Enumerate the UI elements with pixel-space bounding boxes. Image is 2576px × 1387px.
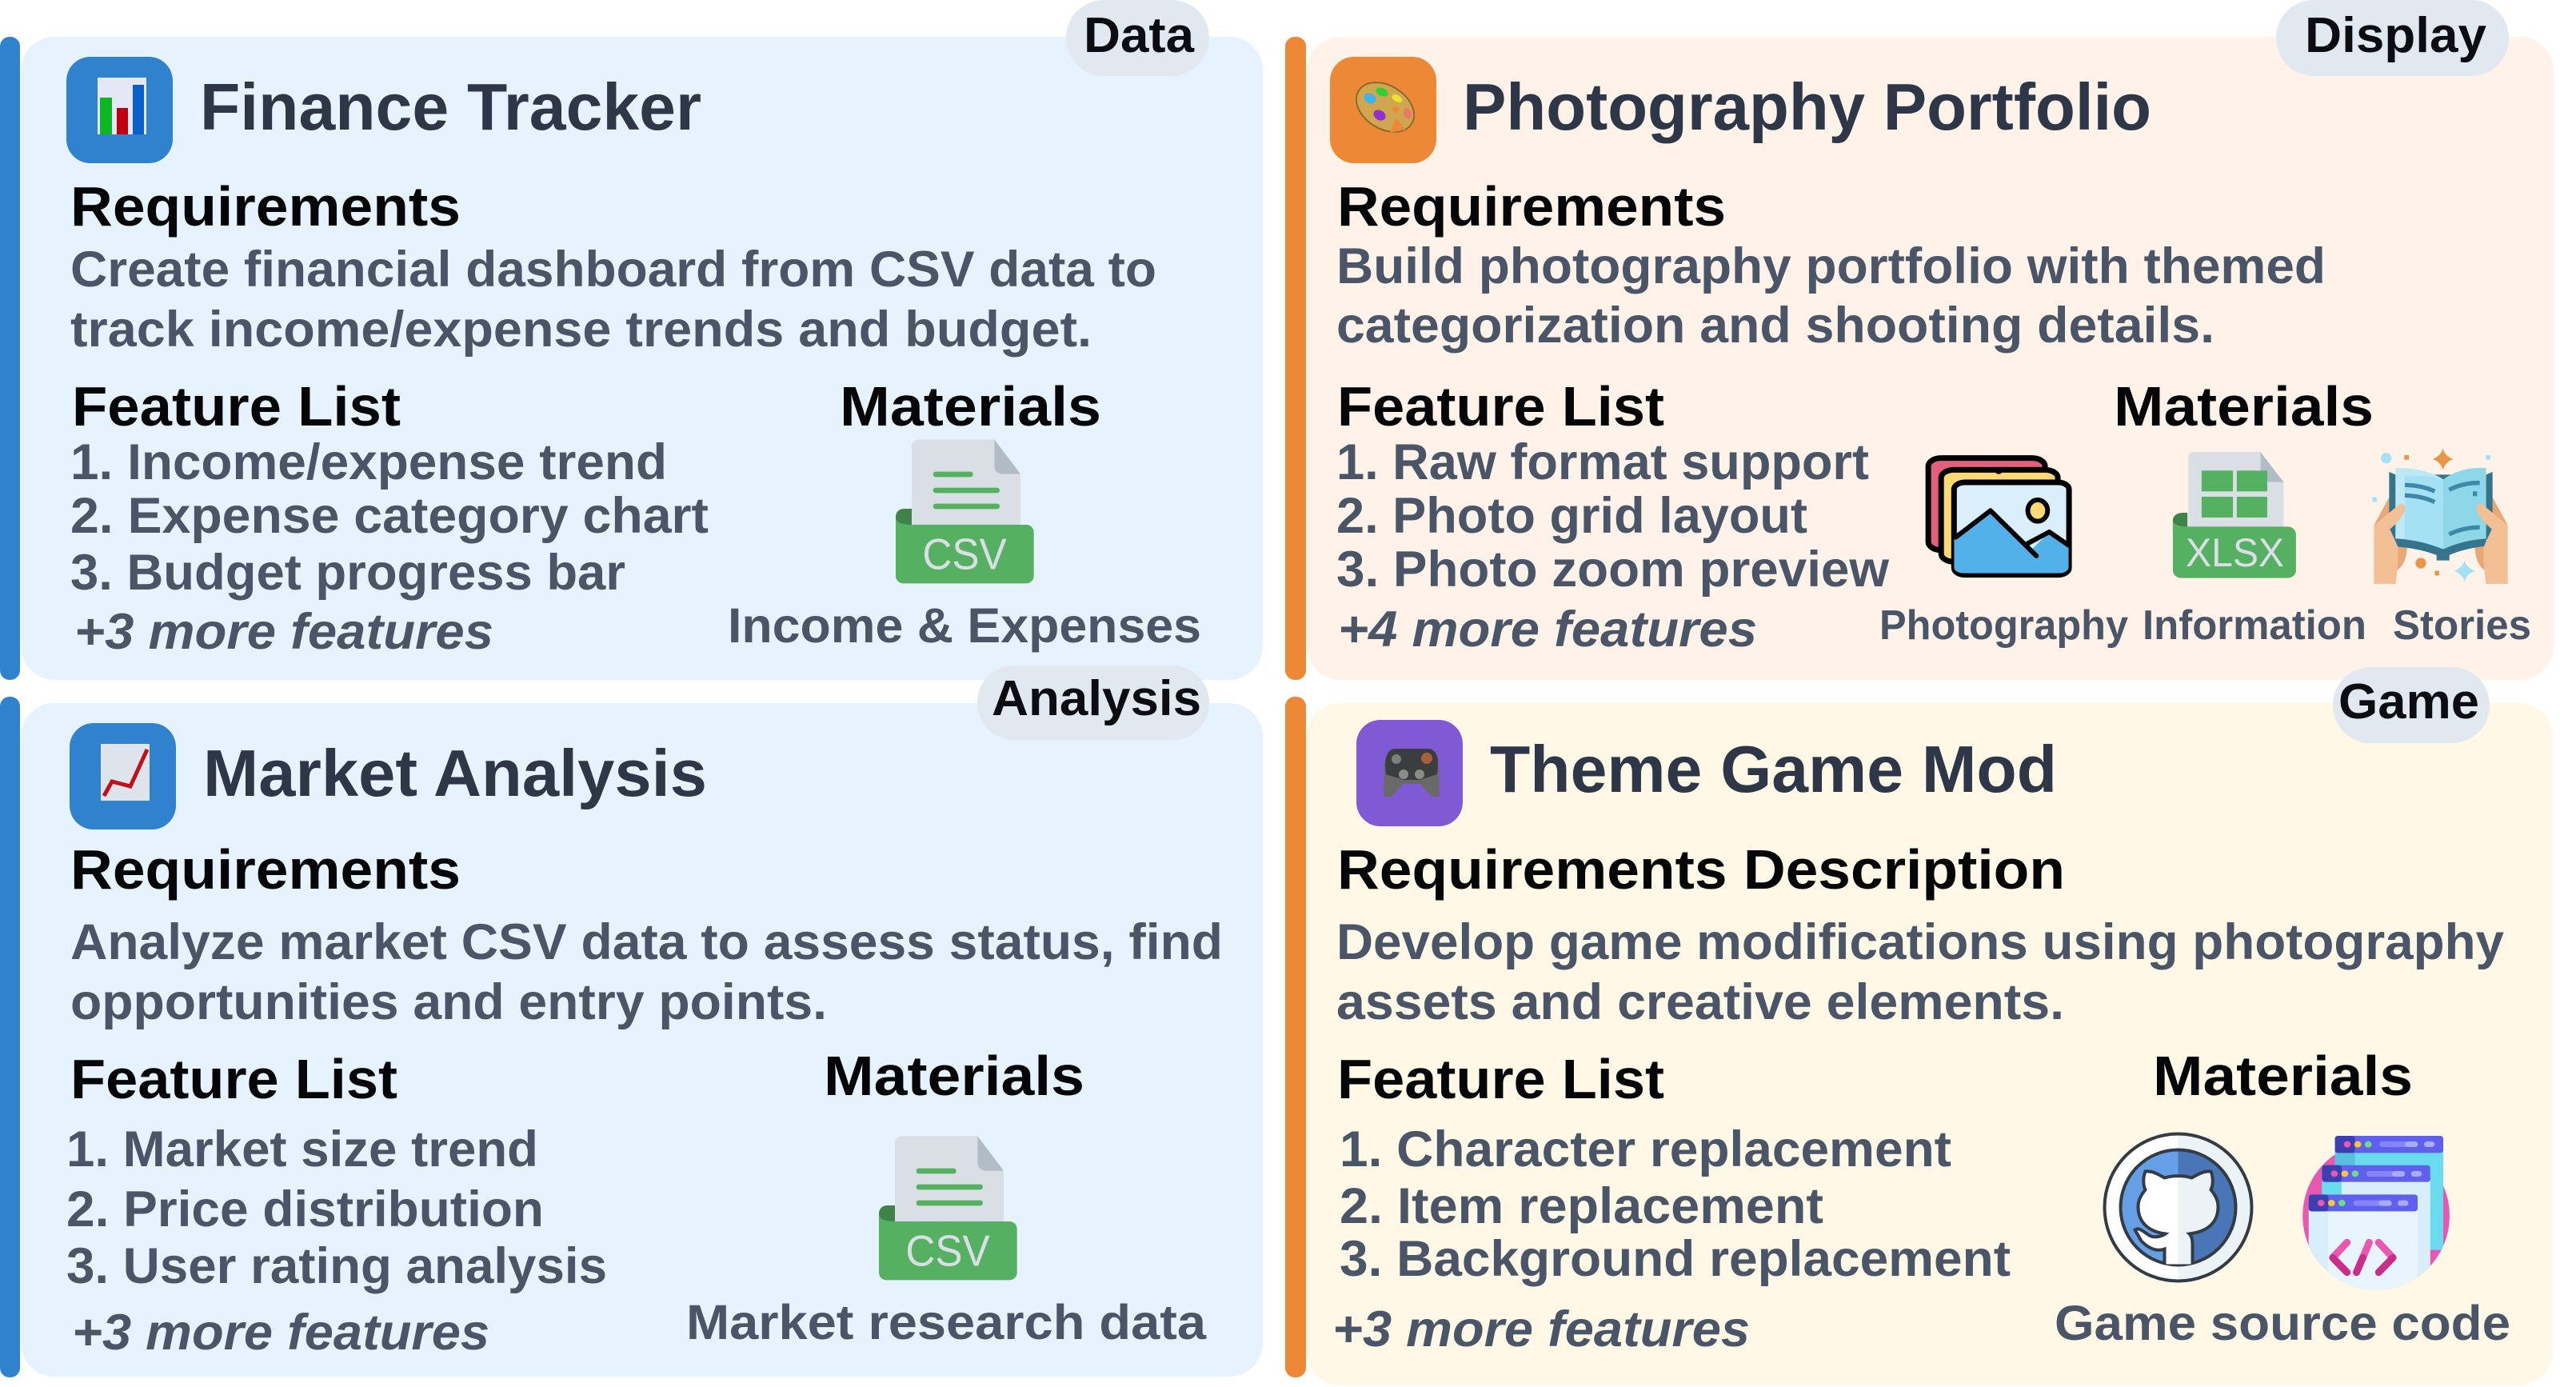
heading: requirements: Requirements [1337,175,1726,238]
feature list: +3 more features [72,1305,489,1361]
title: Finance Tracker [200,70,701,144]
heading: requirements description: Requirements Description [1337,838,2065,901]
requirements text: opportunities and entry points. [70,974,827,1030]
feature list: +4 more features [1338,602,1757,658]
feature list [1332,1121,2011,1357]
heading: feature list: Feature List [1337,375,1664,438]
feature list: 2. Photo grid layout [1336,488,1807,544]
icon: CSV file [896,439,1034,583]
feature list [66,1121,607,1361]
panel: Theme Game Mod [1285,667,2553,1385]
feature list: 2. Price distribution [66,1181,544,1237]
icon: palette [1330,57,1436,163]
tag: Display: Display [2305,8,2487,63]
icon: open book in hands [2372,449,2508,584]
panel: Market Analysis [0,666,1263,1377]
tag: Data: Data [1084,8,1195,63]
requirements text: Analyze market CSV data to assess status, find [70,914,1223,970]
material labels: Photography [1879,602,2128,649]
feature list: 3. Background replacement [1340,1231,2011,1287]
feature list: 1. Market size trend [66,1121,538,1177]
heading: materials: Materials [840,375,1101,438]
feature list: 3. Budget progress bar [70,545,625,601]
panel: Photography Portfolio [1285,0,2554,680]
heading: materials: Materials [2153,1045,2413,1107]
title: Theme Game Mod [1490,732,2057,806]
heading: requirements: Requirements [70,838,461,901]
feature list: 1. Raw format support [1336,434,1869,490]
tag: Game: Game [2338,674,2479,729]
tag: Game [2333,667,2490,743]
heading: feature list: Feature List [72,375,401,438]
panel: Finance Tracker [0,0,1263,680]
icon: GitHub [2105,1134,2252,1281]
icon: CSV file [879,1136,1017,1280]
requirements text: track income/expense trends and budget. [70,302,1092,358]
feature list: 2. Item replacement [1340,1178,1823,1234]
requirements text [70,914,1223,1030]
requirements text [1336,914,2504,1030]
material labels: Stories [2393,602,2531,649]
material labels: Information [2143,602,2366,649]
requirements text [1336,238,2326,354]
title: Photography Portfolio [1463,70,2151,144]
icon: CSV file: CSV [922,530,1007,579]
icon: bar chart [66,57,173,163]
feature list: 1. Income/expense trend [70,434,667,490]
material labels [1879,602,2531,649]
feature list: 3. Photo zoom preview [1336,542,1890,598]
requirements text [70,242,1156,358]
feature list: +3 more features [1332,1301,1750,1357]
requirements text: Build photography portfolio with themed [1336,238,2326,294]
material label: Income & Expenses [728,598,1201,653]
tag: Data [1066,0,1209,76]
feature list: 1. Character replacement [1340,1121,1951,1177]
material label: Game source code [2055,1296,2510,1350]
icon: XLSX file: XLSX [2186,530,2284,575]
tag: Display [2276,0,2509,76]
icon: code windows [2302,1136,2450,1293]
feature list: 2. Expense category chart [70,488,709,544]
heading: feature list: Feature List [1337,1048,1664,1110]
feature list [70,434,709,660]
tag: Analysis [977,666,1209,740]
material label: Market research data [686,1295,1207,1349]
icon: XLSX file [2173,452,2296,578]
heading: requirements: Requirements [70,175,461,238]
icon: photo stack [1928,458,2071,576]
heading: materials: Materials [824,1045,1084,1107]
requirements text: assets and creative elements. [1336,974,2064,1030]
feature list [1336,434,1890,658]
requirements text: categorization and shooting details. [1336,298,2215,354]
heading: materials: Materials [2114,375,2374,438]
requirements text: Develop game modifications using photography [1336,914,2504,970]
icon: CSV file: CSV [905,1226,990,1276]
requirements text: Create financial dashboard from CSV data to [70,242,1156,298]
title: Market Analysis [203,736,707,810]
feature list: +3 more features [74,604,493,660]
heading: feature list: Feature List [70,1048,397,1110]
icon: rising chart [70,723,176,829]
icon: gamepad [1356,720,1463,826]
tag: Analysis: Analysis [992,671,1201,726]
feature list: 3. User rating analysis [66,1238,607,1294]
